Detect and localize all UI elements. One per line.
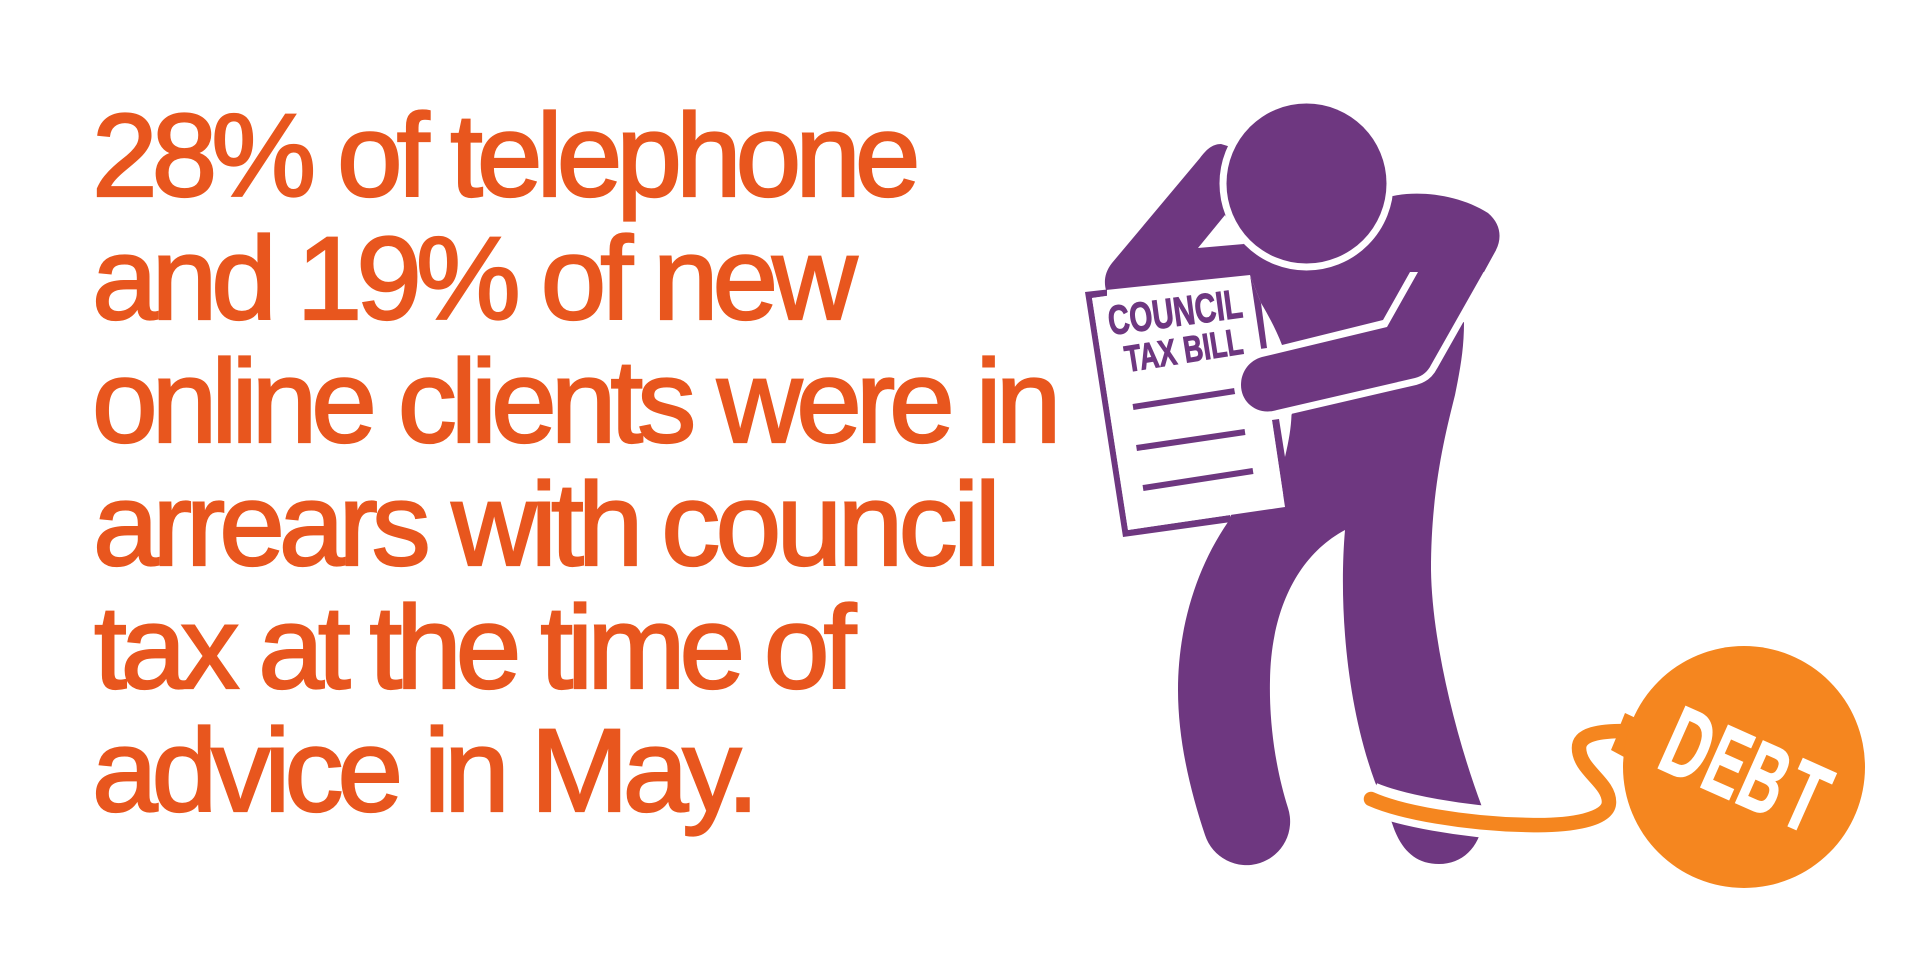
debt ball xyxy=(1623,646,1865,888)
council tax bill paper xyxy=(1085,275,1285,537)
debt label xyxy=(1646,685,1846,855)
figure shoulders and raised arm xyxy=(1105,144,1500,345)
gap between raised arm and head xyxy=(1198,215,1244,248)
debt label: B xyxy=(1723,720,1807,837)
figure torso and legs xyxy=(1178,322,1483,865)
chain xyxy=(1371,731,1625,825)
debt label: T xyxy=(1766,739,1846,855)
headline text: tax at the time of xyxy=(94,582,857,714)
shackle gap xyxy=(1371,798,1529,825)
figure head xyxy=(1226,104,1386,264)
bill title: COUNCIL xyxy=(1105,280,1245,344)
headline text xyxy=(92,90,1055,837)
figure arm xyxy=(1241,240,1496,411)
ball nub xyxy=(1611,713,1640,760)
ball and chain xyxy=(1371,646,1865,888)
headline text: advice in May. xyxy=(92,705,753,837)
headline text: online clients were in xyxy=(92,336,1055,468)
headline text: 28% of telephone xyxy=(92,90,916,222)
debt label: D xyxy=(1646,685,1732,804)
headline text: arrears with council xyxy=(93,459,996,591)
debt label: E xyxy=(1689,704,1767,820)
bill lines xyxy=(1133,391,1253,488)
headline text: and 19% of new xyxy=(92,213,858,345)
figure: person holding bill xyxy=(1085,104,1500,865)
bill title: TAX BILL xyxy=(1122,321,1246,380)
bill title xyxy=(1105,280,1246,380)
